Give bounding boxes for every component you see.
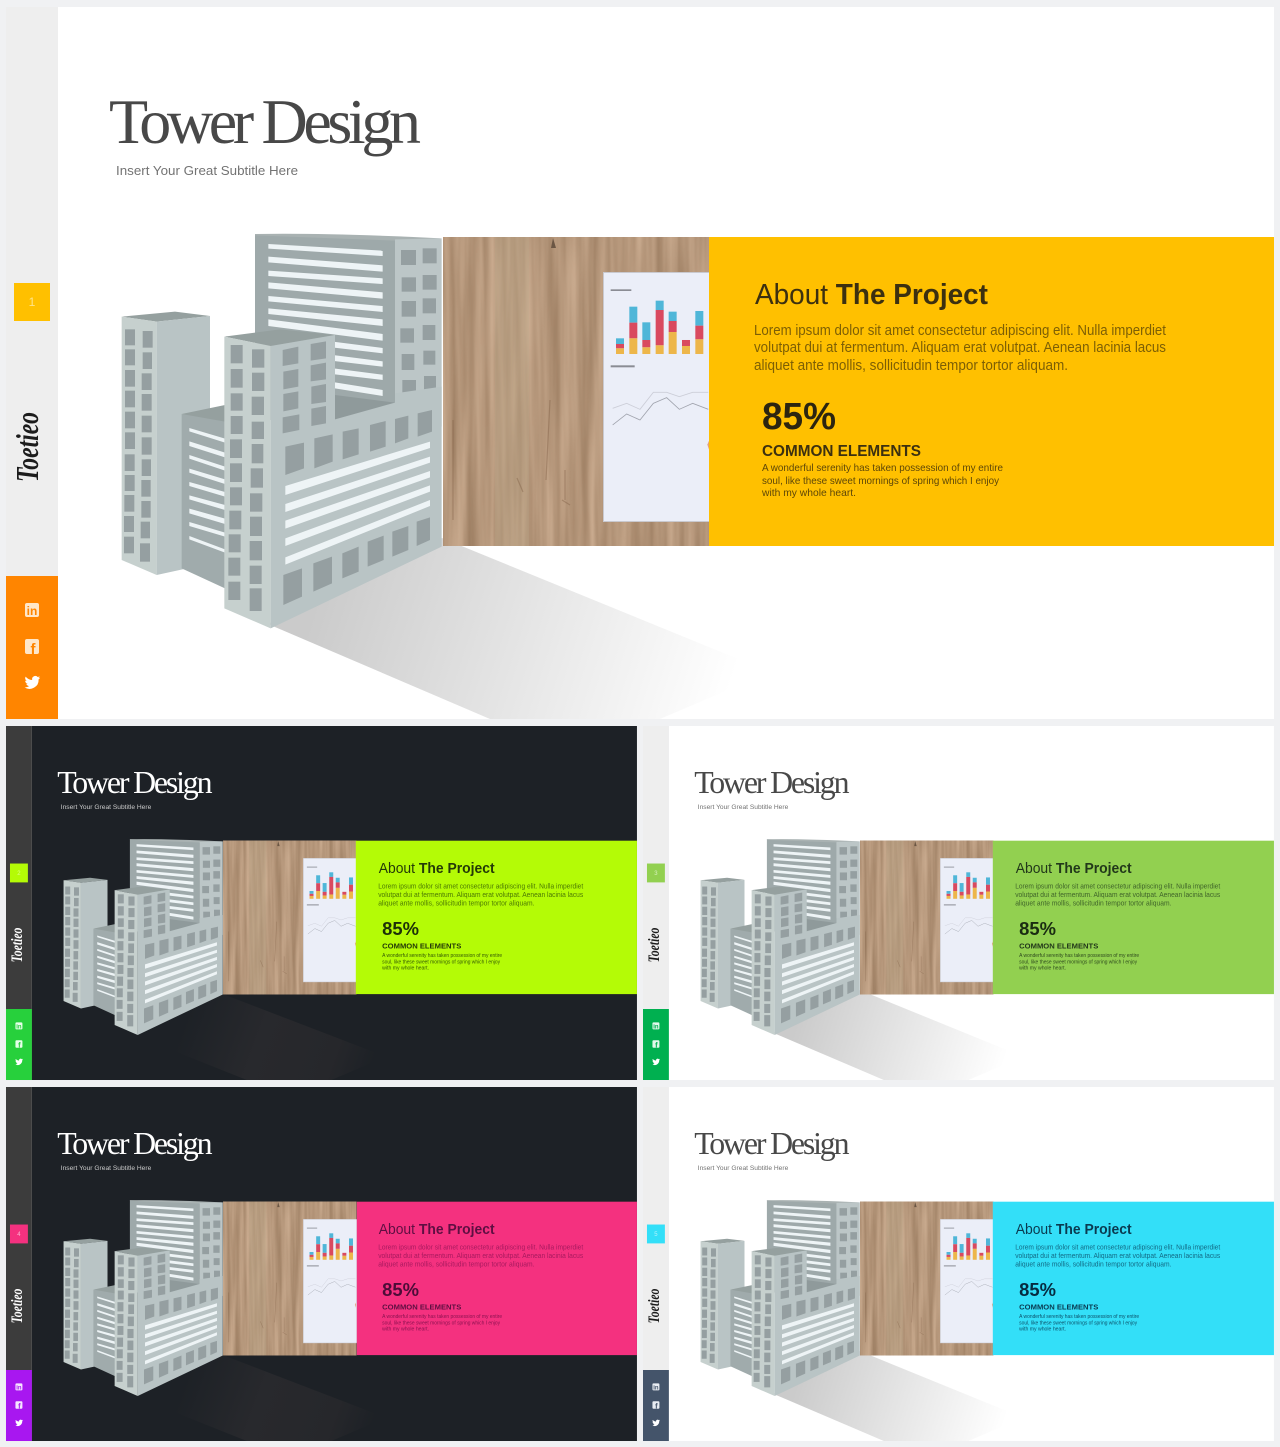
icon: linkedin: in <box>16 1385 22 1391</box>
body text: aliquet ante mollis, sollicitudin tempor tortor aliquam. <box>378 1260 534 1269</box>
title: Tower Design <box>109 86 421 157</box>
body text: volutpat dui at fermentum. Aliquam erat volutpat. Aenean lacinia lacus <box>378 1251 584 1260</box>
stat description: with my whole heart. <box>761 487 856 499</box>
slide background <box>32 1087 637 1441</box>
slide background <box>669 726 1274 1080</box>
title: Tower Design <box>57 765 213 800</box>
sidebar <box>6 7 58 719</box>
stat description: soul, like these sweet mornings of spring which I enjoy <box>382 1320 500 1326</box>
floor shadow <box>773 1351 1023 1441</box>
slide 3: green light theme <box>643 726 1274 1080</box>
stat description <box>761 462 1003 499</box>
title: Tower Design <box>57 1126 213 1161</box>
social panel <box>6 1370 32 1441</box>
stat value: 85% <box>382 1280 419 1301</box>
stat label: COMMON ELEMENTS <box>762 443 921 460</box>
icon: linkedin: in <box>653 1024 659 1030</box>
stat description: A wonderful serenity has taken possession of my entire <box>1019 953 1139 959</box>
stat description <box>382 1314 502 1332</box>
sidebar <box>6 726 32 1080</box>
subtitle: Insert Your Great Subtitle Here <box>61 804 152 811</box>
buildings, wood wall and chart poster <box>64 1200 357 1396</box>
body text: Lorem ipsum dolor sit amet consectetur adipiscing elit. Nulla imperdiet <box>378 881 583 890</box>
title: Tower Design <box>694 1126 850 1161</box>
stat label: COMMON ELEMENTS <box>382 941 461 950</box>
icon: twitter <box>15 1420 23 1426</box>
icon: linkedin: in <box>27 604 37 618</box>
icon: twitter <box>25 676 40 689</box>
icon: facebook <box>25 639 39 658</box>
stat description: soul, like these sweet mornings of spring which I enjoy <box>762 475 1000 487</box>
body text: Lorem ipsum dolor sit amet consectetur adipiscing elit. Nulla imperdiet <box>1015 881 1220 890</box>
buildings, wood wall and chart poster <box>64 839 357 1035</box>
stat description: A wonderful serenity has taken possession of my entire <box>382 1314 502 1320</box>
body text: Lorem ipsum dolor sit amet consectetur adipiscing elit. Nulla imperdiet <box>754 323 1166 339</box>
stat description <box>382 953 502 971</box>
stat label: COMMON ELEMENTS <box>382 1302 461 1311</box>
icon: facebook: f <box>18 1402 21 1411</box>
floor shadow <box>138 994 386 1080</box>
page number badge <box>10 1225 28 1243</box>
body text <box>754 323 1166 374</box>
subtitle: Insert Your Great Subtitle Here <box>698 804 789 811</box>
stat description: soul, like these sweet mornings of spring which I enjoy <box>382 959 500 965</box>
page number badge <box>10 864 28 882</box>
panel: about the project <box>993 841 1274 994</box>
stat description: with my whole heart. <box>382 965 429 971</box>
social panel <box>643 1009 669 1080</box>
stat description: with my whole heart. <box>1019 965 1066 971</box>
stat value: 85% <box>1019 919 1056 940</box>
icon: facebook: f <box>655 1041 658 1050</box>
body text: volutpat dui at fermentum. Aliquam erat volutpat. Aenean lacinia lacus <box>1015 890 1221 899</box>
icon: linkedin: in <box>653 1385 659 1391</box>
floor shadow <box>773 990 1023 1080</box>
body text: aliquet ante mollis, sollicitudin tempor tortor aliquam. <box>1015 1260 1171 1269</box>
body text: volutpat dui at fermentum. Aliquam erat volutpat. Aenean lacinia lacus <box>378 890 584 899</box>
panel: about the project <box>356 841 637 994</box>
page number badge: 5 <box>654 1232 658 1238</box>
floor shadow <box>138 1355 386 1441</box>
heading: About The Project <box>1016 861 1132 877</box>
social panel <box>643 1370 669 1441</box>
body text: aliquet ante mollis, sollicitudin tempor tortor aliquam. <box>378 899 534 908</box>
icon: facebook: f <box>30 641 36 658</box>
panel: about the project <box>357 1202 637 1355</box>
page number badge <box>647 1225 665 1243</box>
social panel <box>6 1009 32 1080</box>
sidebar <box>643 1087 669 1441</box>
buildings, wood wall and chart poster <box>701 1200 994 1396</box>
page number badge: 4 <box>17 1232 21 1238</box>
stat description: A wonderful serenity has taken possession of my entire <box>1019 1314 1139 1320</box>
page number badge: 3 <box>654 871 658 877</box>
icon: twitter <box>15 1059 23 1065</box>
title: Tower Design <box>694 765 850 800</box>
panel: about the project <box>993 1202 1274 1355</box>
brand name: Toetieo <box>9 412 45 482</box>
body text: aliquet ante mollis, sollicitudin tempor tortor aliquam. <box>754 358 1068 374</box>
page number badge: 2 <box>17 871 21 877</box>
heading: About The Project <box>379 1222 495 1238</box>
stat label: COMMON ELEMENTS <box>1019 1302 1098 1311</box>
icon: twitter <box>652 1420 660 1426</box>
body text <box>1015 881 1221 908</box>
subtitle: Insert Your Great Subtitle Here <box>116 163 298 178</box>
heading: About The Project <box>379 861 495 877</box>
stat description: A wonderful serenity has taken possession of my entire <box>382 953 502 959</box>
icon: linkedin: in <box>16 1024 22 1030</box>
sidebar <box>643 726 669 1080</box>
stat description: A wonderful serenity has taken possession of my entire <box>762 462 1003 474</box>
body text: volutpat dui at fermentum. Aliquam erat volutpat. Aenean lacinia lacus <box>754 340 1166 356</box>
page number badge <box>647 864 665 882</box>
body text <box>378 881 584 908</box>
buildings, wood wall and chart poster <box>701 839 994 1035</box>
icon: facebook: f <box>655 1402 658 1411</box>
brand name: Toetieo <box>9 1289 26 1323</box>
slide background <box>669 1087 1274 1441</box>
slide 2: lime dark theme <box>6 726 637 1080</box>
page number badge: 1 <box>29 295 36 309</box>
buildings, wood wall and chart poster <box>122 234 711 628</box>
body text <box>1015 1242 1221 1269</box>
body text: aliquet ante mollis, sollicitudin tempor tortor aliquam. <box>1015 899 1171 908</box>
stat label: COMMON ELEMENTS <box>1019 941 1098 950</box>
social panel <box>6 576 58 719</box>
stat description <box>1019 953 1139 971</box>
body text: Lorem ipsum dolor sit amet consectetur adipiscing elit. Nulla imperdiet <box>378 1242 583 1251</box>
floor shadow <box>268 538 770 719</box>
page number badge <box>14 283 50 321</box>
body text: volutpat dui at fermentum. Aliquam erat volutpat. Aenean lacinia lacus <box>1015 1251 1221 1260</box>
stat value: 85% <box>382 919 419 940</box>
slide 1: yellow light theme <box>6 7 1274 719</box>
brand name: Toetieo <box>9 928 26 962</box>
brand name: Toetieo <box>646 928 663 962</box>
stat description <box>1019 1314 1139 1332</box>
subtitle: Insert Your Great Subtitle Here <box>61 1165 152 1172</box>
stat description: with my whole heart. <box>1019 1326 1066 1332</box>
brand name: Toetieo <box>646 1289 663 1323</box>
panel: about the project <box>709 237 1274 546</box>
stat description: with my whole heart. <box>382 1326 429 1332</box>
stat value: 85% <box>762 396 836 438</box>
stat description: soul, like these sweet mornings of spring which I enjoy <box>1019 1320 1137 1326</box>
body text: Lorem ipsum dolor sit amet consectetur adipiscing elit. Nulla imperdiet <box>1015 1242 1220 1251</box>
slide background <box>32 726 637 1080</box>
heading: About The Project <box>1016 1222 1132 1238</box>
icon: twitter <box>652 1059 660 1065</box>
sidebar <box>6 1087 32 1441</box>
slide 5: cyan light theme <box>643 1087 1274 1441</box>
stat value: 85% <box>1019 1280 1056 1301</box>
slide background <box>58 7 1274 719</box>
heading: About The Project <box>755 279 988 311</box>
slide 4: pink dark theme <box>6 1087 637 1441</box>
body text <box>378 1242 584 1269</box>
icon: facebook: f <box>18 1041 21 1050</box>
subtitle: Insert Your Great Subtitle Here <box>698 1165 789 1172</box>
stat description: soul, like these sweet mornings of spring which I enjoy <box>1019 959 1137 965</box>
